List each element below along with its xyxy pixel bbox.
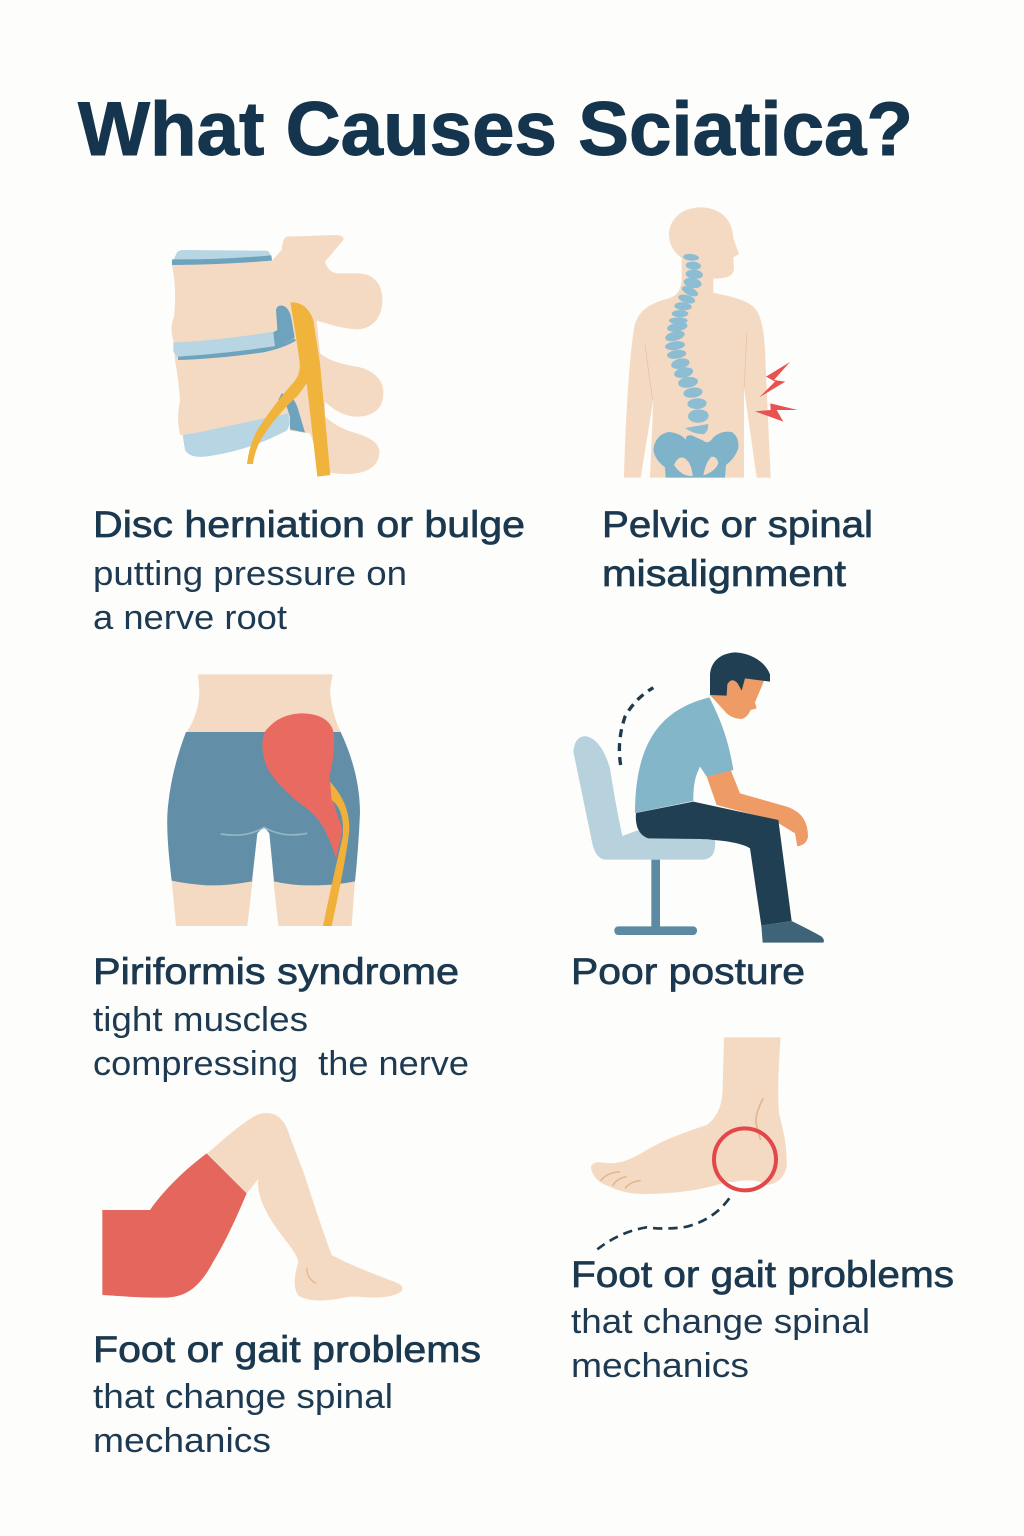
illustration: piriformis syndrome [167, 674, 360, 926]
text: foot or gait left: that change spinal [93, 1378, 393, 1416]
text: poor posture: Poor posture [571, 951, 805, 992]
shorts [167, 732, 360, 885]
piriformis muscle [262, 713, 343, 858]
illustration: poor posture [573, 652, 824, 943]
text: disc herniation: putting pressure on [93, 555, 407, 593]
bulge [273, 305, 295, 347]
illustration: pelvic or spinal misalignment [624, 207, 798, 478]
spine [664, 253, 709, 434]
text: foot or gait right: Foot or gait problems [571, 1254, 954, 1295]
text: piriformis syndrome [93, 951, 469, 1083]
text: foot or gait left: Foot or gait problems [93, 1329, 481, 1370]
illustration: foot [591, 1037, 787, 1249]
text: piriformis syndrome: compressing the nerve [93, 1045, 469, 1083]
pelvis [653, 432, 738, 478]
top disc [172, 250, 272, 265]
red circle [714, 1128, 776, 1190]
text: pelvic or spinal misalignment: Pelvic or spinal [602, 504, 873, 545]
foot skin [591, 1037, 787, 1194]
middle disc [173, 332, 294, 357]
curve indicator [619, 688, 653, 765]
shirt [635, 697, 733, 813]
neck and head skin [710, 675, 764, 719]
dashed trail [597, 1198, 729, 1249]
lower disc [183, 410, 290, 457]
text: foot or gait right: that change spinal [571, 1303, 870, 1341]
leg skin [207, 1113, 402, 1301]
text: piriformis syndrome: Piriformis syndrome [93, 951, 459, 992]
chair [573, 736, 715, 860]
text: foot or gait left: mechanics [93, 1422, 271, 1460]
heel highlight [727, 1180, 767, 1192]
text: pelvic or spinal misalignment [602, 504, 873, 594]
shorts [102, 1153, 247, 1298]
nerve root [247, 302, 330, 477]
text: pelvic or spinal misalignment: misalignment [602, 553, 847, 594]
shoe [761, 921, 824, 943]
illustration: disc herniation [171, 235, 383, 477]
forearm [707, 770, 808, 846]
text: disc herniation [93, 504, 525, 637]
text: foot or gait right [571, 1254, 954, 1385]
illustration: leg [102, 1113, 402, 1301]
trousers [636, 802, 792, 926]
title: What Causes Sciatica? [78, 87, 913, 172]
text: piriformis syndrome: tight muscles [93, 1001, 308, 1039]
text: disc herniation: a nerve root [93, 599, 288, 637]
body silhouette [624, 207, 771, 478]
text: disc herniation: Disc herniation or bulge [93, 504, 525, 545]
hair [710, 652, 770, 696]
sciatic nerve [323, 782, 349, 926]
text: foot or gait left [93, 1329, 481, 1460]
vertebrae [171, 235, 383, 474]
text: foot or gait right: mechanics [571, 1347, 749, 1385]
waist and legs [187, 674, 341, 732]
pain bolts [759, 362, 790, 397]
